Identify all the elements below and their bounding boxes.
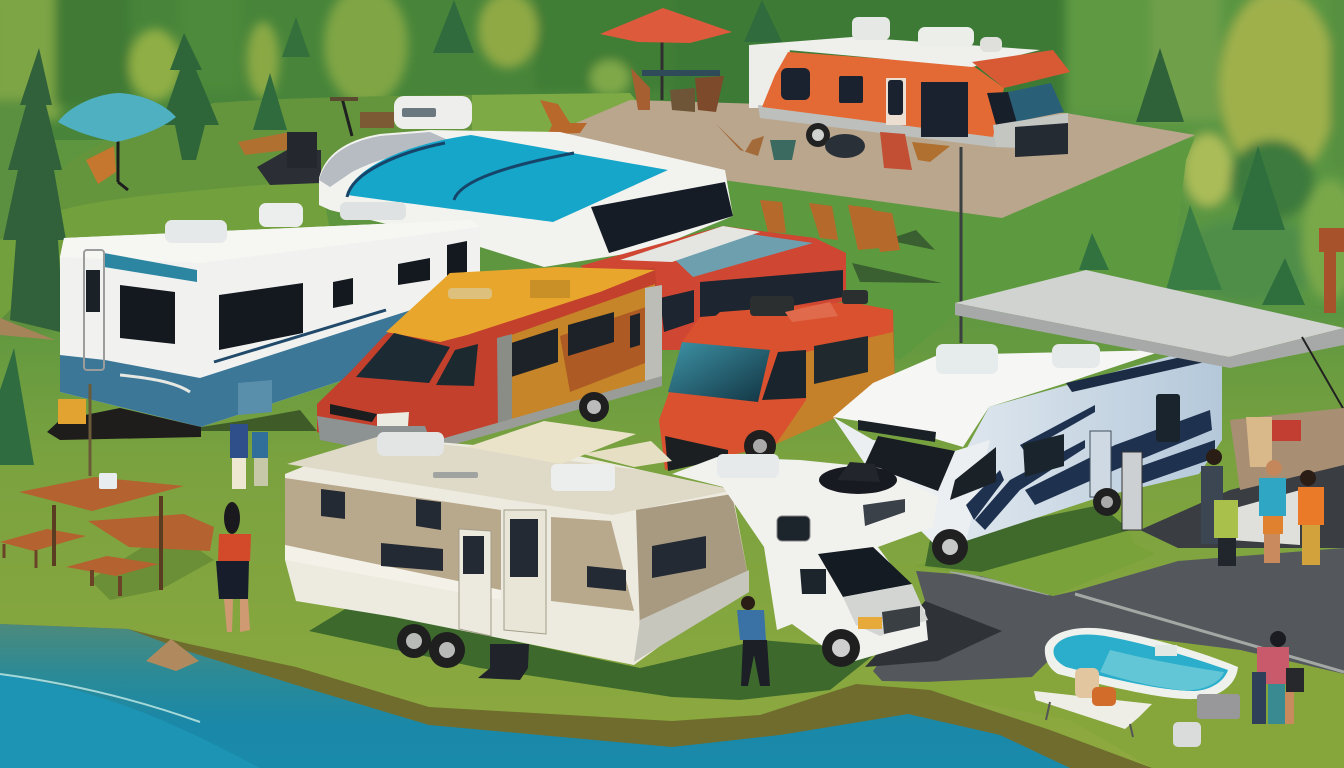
patio furniture (540, 100, 961, 343)
picnic grill top left (238, 97, 394, 185)
blue lower panel (60, 288, 480, 427)
door posts (497, 334, 512, 428)
wooden sign post (1319, 228, 1344, 313)
bench left (0, 529, 86, 551)
teal roof (347, 135, 668, 222)
windshield (1008, 83, 1064, 122)
front bumper and grille (317, 416, 430, 448)
roof AC (717, 454, 779, 478)
body (672, 457, 938, 665)
white class C motorhome (672, 454, 938, 667)
roof glass (672, 230, 813, 277)
mug on table (99, 473, 117, 489)
conifer trees (0, 0, 1305, 465)
lawn: bright strip by the chair (472, 93, 640, 140)
red body (317, 268, 662, 448)
grass shadow (925, 505, 1130, 572)
top dark line (1066, 353, 1205, 392)
RV: large white and blue left (47, 202, 480, 476)
lawn: mid terrace (0, 180, 330, 320)
windshield (356, 333, 450, 383)
bench front (66, 556, 159, 576)
side panel (497, 284, 660, 425)
picnic table: left (0, 477, 214, 600)
chassis (99, 410, 317, 439)
lawn chairs (760, 200, 942, 283)
lounger by pool (1034, 668, 1152, 737)
orange body (762, 52, 1004, 137)
patio: upper paving (536, 100, 1195, 218)
stripes (966, 405, 1215, 530)
table legs (54, 496, 161, 590)
grille (665, 436, 728, 471)
roof (682, 304, 893, 350)
bench back (88, 514, 214, 551)
person: beside motorhome (737, 596, 770, 686)
stripe (104, 253, 197, 282)
tabletop (19, 477, 184, 511)
road shadow (865, 601, 1002, 667)
umbrella: teal with chair (58, 93, 176, 190)
brown bank (0, 624, 1152, 768)
windshield (818, 547, 912, 597)
roof gear (750, 296, 794, 316)
windows (321, 489, 345, 519)
road (873, 548, 1344, 684)
upper window (863, 499, 905, 526)
roof (833, 350, 1165, 447)
rock (146, 639, 199, 671)
bright water (0, 674, 260, 768)
roof (287, 437, 735, 515)
tan rear panel (776, 332, 895, 444)
road marking (950, 571, 1344, 672)
roof AC (394, 96, 472, 129)
RV: orange-red small front right (659, 290, 895, 471)
lawn: upper clearing (40, 93, 630, 213)
white-blue motorhome right (833, 344, 1222, 565)
rear white panel (749, 45, 790, 108)
yellow roof (386, 267, 655, 342)
door (1090, 431, 1111, 497)
windows (120, 285, 175, 344)
front cap (972, 50, 1070, 88)
body (285, 437, 749, 665)
white body (60, 220, 480, 427)
side (955, 345, 1222, 541)
black roof gear (819, 466, 897, 494)
people at deck (1201, 449, 1324, 566)
steps (478, 644, 529, 680)
pool lawn (880, 630, 1344, 768)
roof slabs (467, 421, 636, 464)
shadow under beige trailer (309, 606, 880, 700)
white shell (319, 130, 733, 267)
shoreline and lake (0, 624, 1152, 768)
camp gear bag (1197, 694, 1240, 719)
orange RV top right (749, 17, 1070, 157)
roof AC units (165, 220, 227, 243)
lower silver stripe (758, 105, 1018, 148)
dark window band (700, 270, 843, 322)
front window (591, 182, 733, 253)
side window (777, 516, 810, 541)
awning (955, 270, 1344, 410)
grass island (916, 510, 1156, 596)
grey roof cap (319, 132, 455, 187)
camp gear bin (1173, 722, 1201, 747)
shadow (90, 530, 214, 600)
forest backdrop (0, 0, 1344, 333)
roof AC units (936, 344, 998, 374)
wheels (397, 624, 431, 658)
roof gear (377, 432, 444, 456)
ladder (84, 250, 104, 370)
person pair near left RV (230, 424, 268, 489)
side tan panels (285, 478, 501, 590)
cab (833, 417, 990, 560)
hood (843, 584, 928, 636)
rear panel (636, 494, 749, 632)
RV: teal-roof large rear trailer (319, 96, 733, 267)
doors (459, 529, 491, 636)
person: woman in red (216, 502, 251, 632)
roof AC units (852, 17, 890, 40)
windows (865, 436, 955, 491)
camp kitchen deck right (1140, 408, 1344, 548)
white roof (749, 37, 1040, 67)
umbrella: red with table (600, 8, 732, 112)
RV: red back right (580, 226, 846, 350)
family by pool (1252, 631, 1304, 724)
beige trailer (285, 421, 749, 680)
body (659, 302, 895, 470)
water (0, 624, 1070, 768)
windshield (668, 342, 770, 402)
swimming pool (1045, 628, 1238, 699)
step unit (1122, 452, 1142, 530)
RV: yellow-red center (317, 267, 662, 448)
lawn: right meadow (700, 137, 1195, 360)
